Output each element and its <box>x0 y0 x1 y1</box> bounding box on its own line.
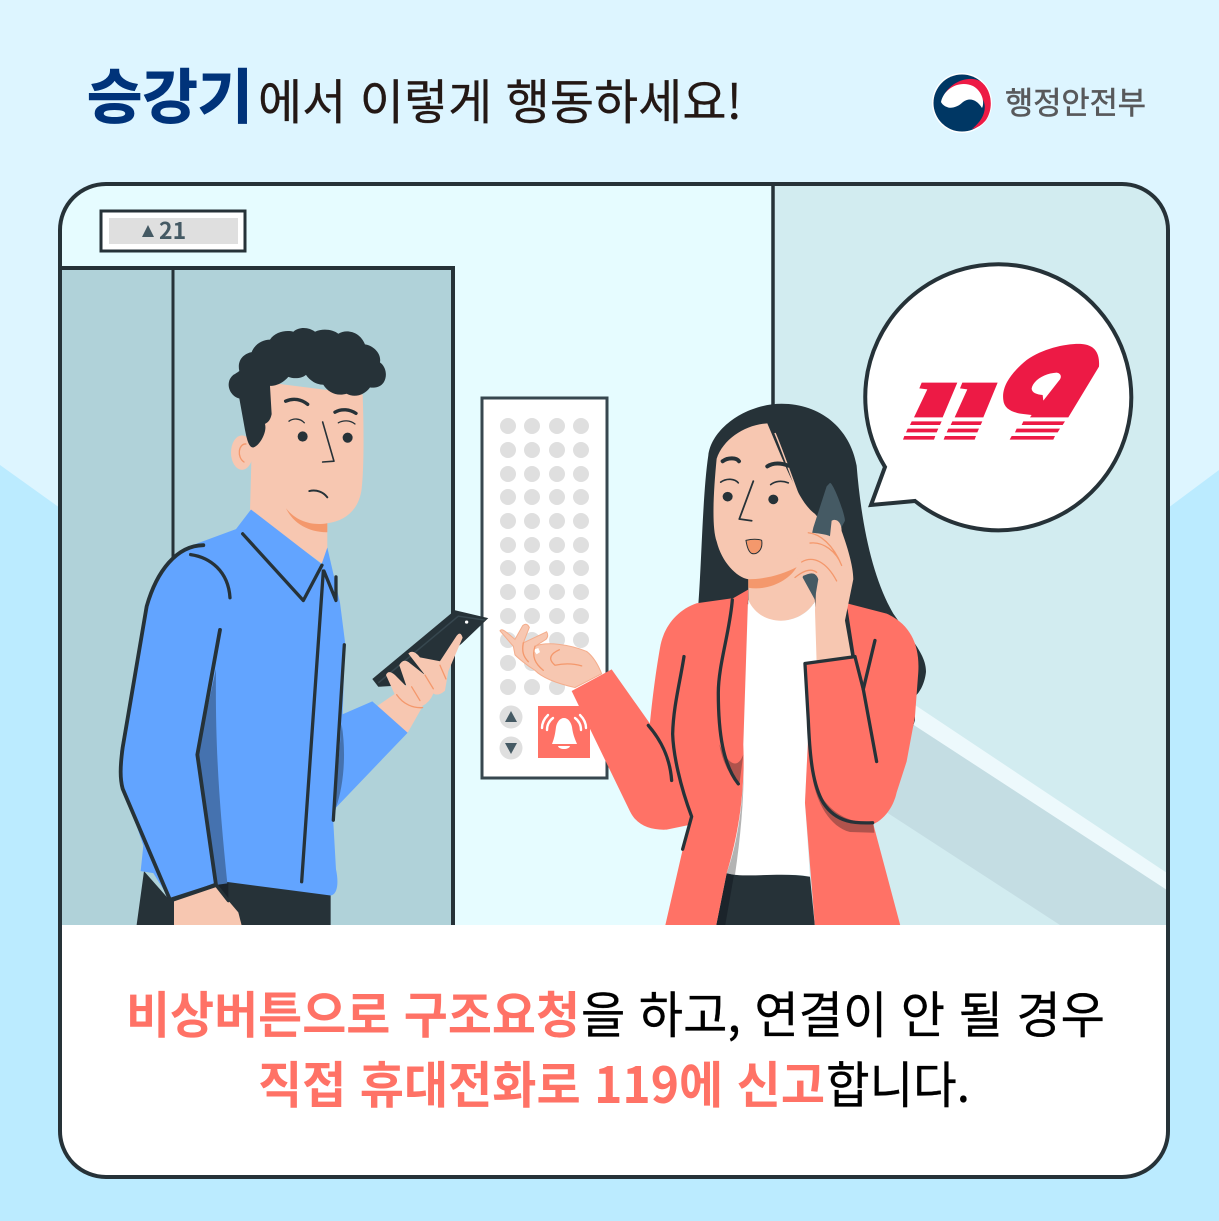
coral jacket <box>572 590 918 927</box>
speech bubble with 119 <box>865 264 1131 530</box>
caption line 1: 을 하고, 연결이 안 될 경우 <box>581 976 1105 1048</box>
woman's back hair <box>698 404 926 736</box>
phone at woman's ear <box>803 483 845 600</box>
white caption area <box>60 925 1170 1179</box>
smartphone in man's hand <box>372 610 488 687</box>
man with smartphone <box>120 328 488 932</box>
up and down buttons <box>500 706 522 760</box>
white blouse <box>727 600 818 877</box>
caption line 1: 비상버튼으로 구조요청 <box>126 976 580 1048</box>
woman's trousers <box>716 873 815 927</box>
main panel <box>60 184 1170 1179</box>
blue shirt <box>120 509 408 901</box>
floor indicator: 21 <box>159 212 186 246</box>
woman's face and neck <box>713 423 827 621</box>
jacket sleeve outline <box>805 640 877 823</box>
elevator door <box>60 268 453 928</box>
man's wrist and phone hand back <box>377 693 423 733</box>
caption text <box>126 976 1105 1118</box>
title: 승강기 <box>87 50 253 135</box>
ministry logo <box>932 73 1146 133</box>
caption line 2: 합니다. <box>826 1046 970 1118</box>
emblem: taegeuk <box>932 73 992 133</box>
man's hair <box>229 328 386 447</box>
floor indicator <box>101 211 245 251</box>
woman's gesturing hand <box>500 624 602 688</box>
elevator button panel <box>482 398 607 778</box>
ministry logo: 행정안전부 <box>1005 78 1146 123</box>
caption line 1 <box>126 976 1105 1048</box>
man's trousers <box>136 872 331 925</box>
title: 에서 이렇게 행동하세요! <box>258 63 742 133</box>
119 logo <box>903 344 1099 440</box>
title <box>87 50 742 135</box>
man's left hand at cuff <box>174 887 242 925</box>
woman's hand holding phone <box>794 520 853 662</box>
right wall <box>773 184 1170 929</box>
man's hand gripping phone <box>386 634 463 708</box>
alarm bell button <box>538 706 590 758</box>
man's face and neck <box>231 383 364 567</box>
caption line 2: 직접 휴대전화로 119에 신고 <box>258 1046 825 1118</box>
woman on the phone <box>500 404 926 927</box>
